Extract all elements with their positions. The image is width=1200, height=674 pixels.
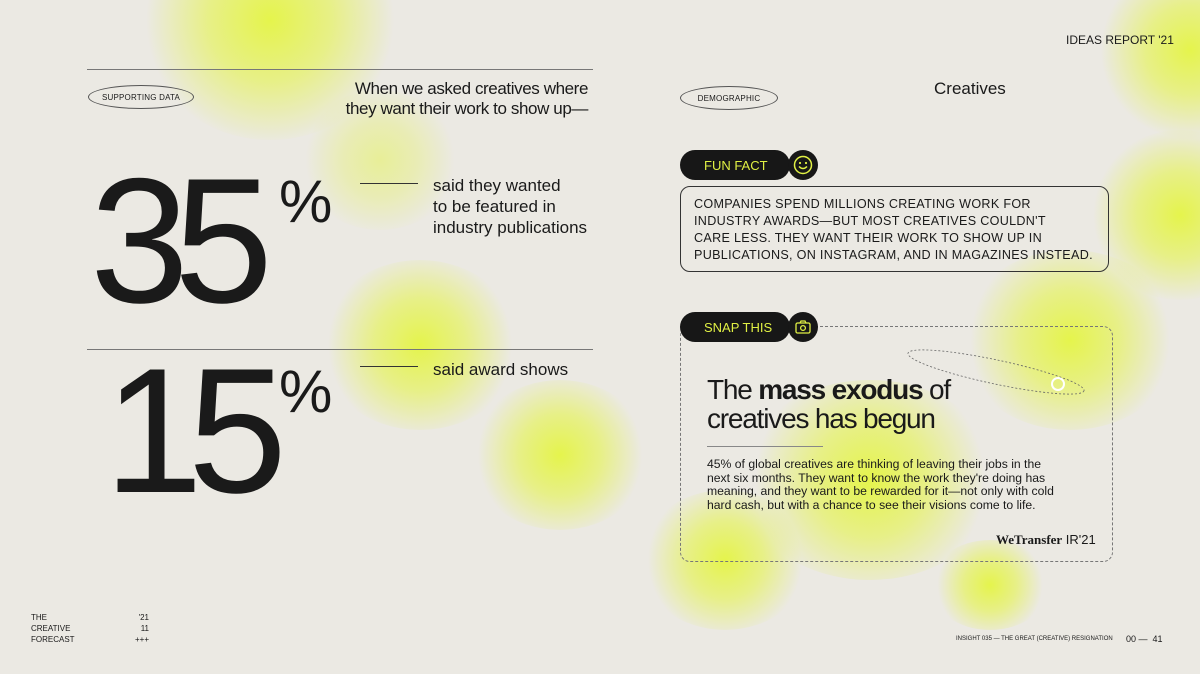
footer left: FORECAST — [31, 635, 75, 644]
footer left: +++ — [135, 635, 149, 644]
fun fact box: INDUSTRY AWARDS—BUT MOST CREATIVES COULDN'T — [694, 214, 1046, 228]
snap this pill: SNAP THIS — [704, 320, 772, 334]
body text: 45% of global creatives are thinking of leaving their jobs in the — [707, 457, 1041, 471]
stat 15%: % — [279, 358, 332, 425]
snap this card — [680, 326, 1113, 562]
badge: supporting data — [88, 85, 194, 109]
body text: hard cash, but with a chance to see their visions come to life. — [707, 498, 1036, 512]
icon: camera — [788, 312, 818, 342]
body text: meaning, and they want to be rewarded for it—not only with cold — [707, 484, 1054, 498]
heading — [346, 79, 588, 118]
body text — [707, 457, 1054, 512]
stat 35%: to be featured in — [433, 197, 556, 216]
footer left: CREATIVE — [31, 624, 70, 633]
headline — [707, 374, 952, 434]
header label: IDEAS REPORT '21 — [1066, 33, 1174, 47]
stat 15% — [104, 331, 568, 530]
badge: supporting data: SUPPORTING DATA — [102, 92, 180, 102]
stat 15%: 15 — [104, 331, 272, 530]
orbit graphic — [908, 350, 1084, 394]
stat 35% — [90, 141, 587, 340]
heading: creatives: Creatives — [934, 79, 1006, 98]
badge: demographic — [680, 86, 778, 110]
fun fact pill: FUN FACT — [704, 158, 768, 172]
heading: When we asked creatives where — [355, 79, 588, 98]
fun fact pill — [680, 150, 790, 180]
footer right: INSIGHT 035 — THE GREAT (CREATIVE) RESIGNATION — [956, 636, 1113, 642]
stat 35%: % — [279, 168, 332, 235]
fun fact box: COMPANIES SPEND MILLIONS CREATING WORK FOR — [694, 197, 1031, 211]
stat 35%: 35 — [90, 141, 258, 340]
badge: demographic: DEMOGRAPHIC — [698, 94, 760, 102]
icon: smiley — [788, 150, 818, 180]
headline: creatives has begun — [707, 403, 935, 434]
footer left — [31, 613, 149, 644]
heading: they want their work to show up— — [346, 99, 588, 118]
footer left: 11 — [141, 624, 149, 633]
footer left: THE — [31, 613, 47, 622]
footer left: '21 — [139, 613, 149, 622]
body text: next six months. They want to know the work they're doing has — [707, 470, 1045, 484]
fun fact box: PUBLICATIONS, ON INSTAGRAM, AND IN MAGAZINES INSTEAD. — [694, 248, 1093, 262]
headline: The mass exodus of — [707, 374, 950, 405]
logo: WeTransfer IR'21 — [996, 532, 1096, 547]
stat 35%: said they wanted — [433, 176, 561, 195]
text: 00 — 41 — [1126, 634, 1163, 644]
fun fact box — [680, 186, 1109, 272]
fun fact box: CARE LESS. THEY WANT THEIR WORK TO SHOW UP IN — [694, 231, 1042, 245]
stat 15%: said award shows — [433, 360, 568, 379]
stat 35%: industry publications — [433, 218, 587, 237]
snap this pill — [680, 312, 790, 342]
